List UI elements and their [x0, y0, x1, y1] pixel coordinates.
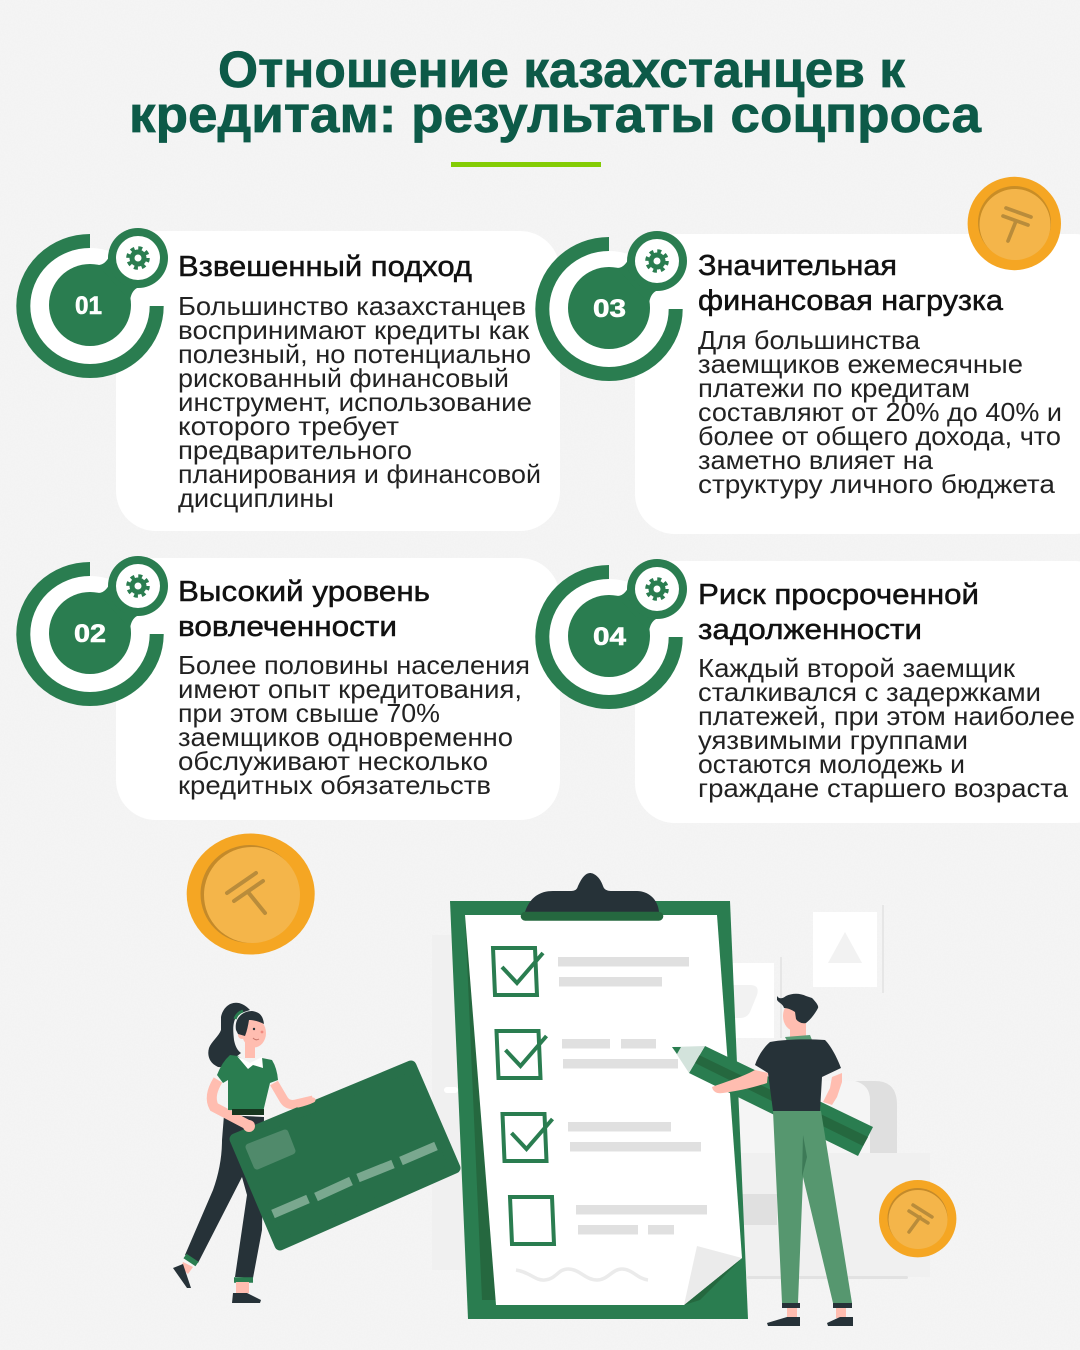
title underline	[451, 162, 601, 167]
checkbox 1	[493, 948, 543, 995]
illustration: credit card	[235, 1066, 455, 1245]
background scene: furniture and frames	[432, 905, 930, 1279]
body 04: платежей, при этом наиболее	[698, 701, 1075, 731]
panel: card 04	[542, 559, 1080, 823]
woman hands on card	[243, 1100, 313, 1132]
panel: card 01	[23, 228, 560, 531]
badge 04: 04	[593, 623, 626, 651]
body 01: рискованный финансовый	[178, 363, 509, 393]
badge 04	[542, 559, 687, 702]
title: Отношение казахстанцев к	[218, 41, 905, 98]
body 02	[178, 650, 530, 800]
body 04: граждане старшего возраста	[698, 773, 1069, 803]
panel: card 03	[542, 231, 1080, 534]
body 01: инструмент, использование	[178, 387, 532, 417]
badge 01: 01	[75, 292, 102, 320]
heading 03: финансовая нагрузка	[698, 285, 1004, 317]
illustration: man	[712, 994, 853, 1326]
title: кредитам: результаты соцпроса	[129, 86, 982, 143]
body 02: при этом свыше 70%	[178, 698, 440, 728]
body 04: сталкивался с задержками	[698, 677, 1041, 707]
body 02: заемщиков одновременно	[178, 722, 513, 752]
badge 02	[23, 556, 168, 699]
illustration: woman	[173, 1003, 313, 1303]
body 04: остаются молодежь и	[698, 749, 965, 779]
body 03	[698, 325, 1062, 499]
badge 03: 03	[593, 295, 626, 323]
body 01: планирования и финансовой	[178, 459, 541, 489]
checkbox 2	[496, 1031, 546, 1078]
body 01: Большинство казахстанцев	[178, 291, 526, 321]
heading 01: Взвешенный подход	[178, 251, 472, 283]
title	[129, 41, 982, 143]
body 03: Для большинства	[698, 325, 921, 355]
illustration: clipboard	[450, 873, 748, 1319]
panel: card 02	[23, 556, 560, 820]
heading 02: Высокий уровень	[178, 576, 430, 608]
body 03: структуру личного бюджета	[698, 469, 1056, 499]
badge 03	[542, 231, 687, 374]
body 02: обслуживают несколько	[178, 746, 488, 776]
body 04: Каждый второй заемщик	[698, 653, 1016, 683]
body 04: уязвимыми группами	[698, 725, 968, 755]
body 02: кредитных обязательств	[178, 770, 491, 800]
heading 02: вовлеченности	[178, 611, 397, 643]
icon: coin large	[187, 834, 315, 954]
checkbox 3	[502, 1114, 552, 1161]
body 03: более от общего дохода, что	[698, 421, 1061, 451]
heading 04: Риск просроченной	[698, 579, 979, 611]
heading 03	[698, 250, 1004, 317]
signature squiggle	[516, 1269, 648, 1280]
clipboard clip	[521, 873, 663, 921]
body 02: Более половины населения	[178, 650, 530, 680]
heading 04: задолженности	[698, 614, 922, 646]
badge 02: 02	[74, 620, 106, 648]
heading 04	[698, 579, 979, 646]
illustration: pencil	[672, 1046, 873, 1156]
body 04	[698, 653, 1075, 803]
body 01: которого требует	[178, 411, 399, 441]
badge 01	[23, 228, 168, 371]
body 03: заметно влияет на	[698, 445, 934, 475]
heading 03: Значительная	[698, 250, 897, 282]
body 01: предварительного	[178, 435, 412, 465]
body 03: составляют от 20% до 40% и	[698, 397, 1062, 427]
body 01: воспринимают кредиты как	[178, 315, 530, 345]
body 01: дисциплины	[178, 483, 334, 513]
icon: coin small	[879, 1180, 956, 1257]
body 02: имеют опыт кредитования,	[178, 674, 522, 704]
icon: coin top right	[968, 177, 1061, 270]
body 01: полезный, но потенциально	[178, 339, 531, 369]
body 01	[178, 291, 541, 513]
body 03: заемщиков ежемесячные	[698, 349, 1023, 379]
heading 02	[178, 576, 430, 643]
text placeholder lines	[558, 957, 707, 1234]
body 03: платежи по кредитам	[698, 373, 970, 403]
checkbox 4	[510, 1197, 554, 1244]
